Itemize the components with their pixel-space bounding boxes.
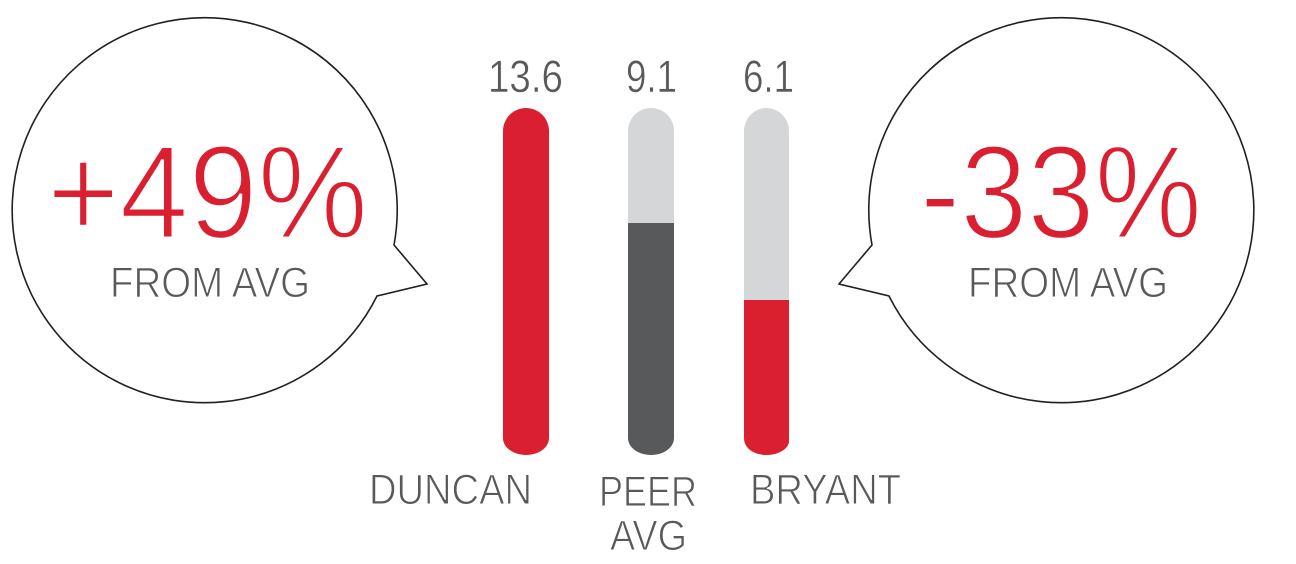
value: peer average 9.1: 9.1 [626,51,677,102]
bar: Bryant [744,108,789,455]
caption: from avg left: FROM AVG [110,259,310,307]
bar track Bryant [744,108,789,301]
value: Duncan 13.6: 13.6 [488,51,563,102]
bar chart [369,51,901,560]
bar fill peer [628,223,674,455]
label: Duncan: DUNCAN [369,466,532,514]
bar: peer average [628,108,674,455]
caption: from avg right: FROM AVG [968,259,1168,307]
label: Bryant: BRYANT [750,466,901,514]
bar: Duncan [503,108,549,455]
value: Bryant 6.1: 6.1 [743,51,794,102]
label line PEER: PEER [599,468,697,516]
stat: minus 33 percent: -33% [920,119,1202,267]
callout: left speech bubble [12,18,427,403]
label line AVG: AVG [610,512,687,560]
bar fill Bryant [744,300,789,455]
stat: plus 49 percent: +49% [47,119,368,267]
speech bubble outline right [839,18,1254,403]
callout: right speech bubble [839,18,1254,403]
bar track peer [628,108,674,224]
speech bubble outline left [12,18,427,403]
label: peer average [599,468,697,560]
